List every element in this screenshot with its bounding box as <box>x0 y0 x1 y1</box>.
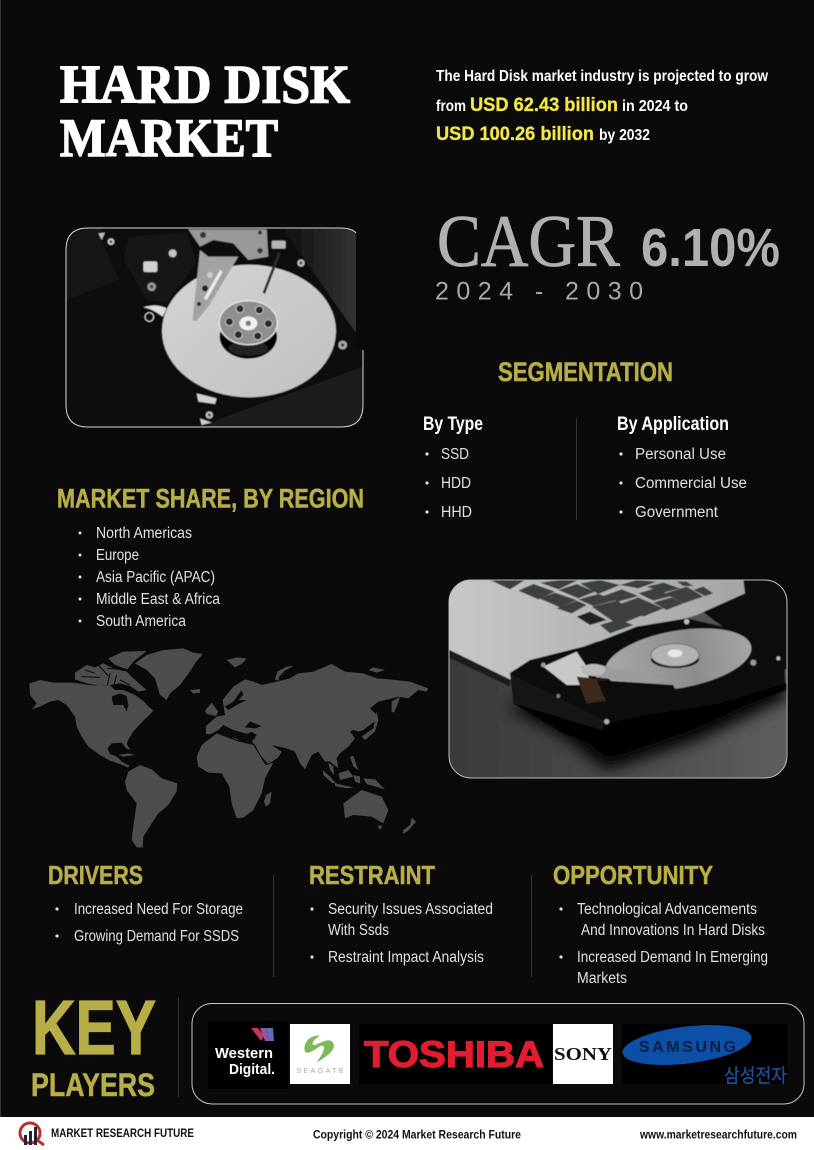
logo: Western Digital: Digital. <box>229 1061 275 1078</box>
heading: market share by region: MARKET SHARE, BY REGION <box>57 484 364 514</box>
restraint panel: Security Issues Associated <box>328 901 493 918</box>
logo: Sony: SONY <box>554 1044 612 1064</box>
market projection text <box>436 68 769 145</box>
footer logo icon <box>20 1123 44 1145</box>
opportunity panel: And Innovations In Hard Disks <box>581 922 765 939</box>
drivers panel: Increased Need For Storage <box>74 901 243 918</box>
logo: Samsung <box>620 1019 787 1088</box>
footer: MARKET RESEARCH FUTURE <box>51 1126 194 1140</box>
key players heading: KEY <box>32 985 156 1071</box>
logo: Seagate: SEAGATE <box>296 1068 344 1075</box>
logo: Western Digital: Western <box>215 1045 273 1062</box>
restraint panel: Restraint Impact Analysis <box>328 949 484 966</box>
world map <box>29 648 428 847</box>
region list <box>78 525 220 630</box>
drivers panel <box>48 860 243 945</box>
logo: Seagate <box>290 1024 350 1084</box>
segmentation list: by application: By Application <box>617 414 729 435</box>
market projection text: The Hard Disk market industry is projected to grow <box>436 68 769 85</box>
logo: Western Digital <box>208 1021 288 1089</box>
opportunity panel: OPPORTUNITY <box>553 860 713 890</box>
segmentation list: by type: HDD <box>441 475 471 492</box>
region list: Middle East & Africa <box>96 591 220 608</box>
restraint panel: With Ssds <box>328 922 389 939</box>
image: hard drive by laptop <box>448 580 790 778</box>
opportunity panel: Technological Advancements <box>577 901 757 918</box>
region list: South America <box>96 613 186 630</box>
region list: Europe <box>96 547 139 564</box>
logo: Samsung: 삼성전자 <box>724 1061 787 1088</box>
segmentation list: by application <box>617 414 747 521</box>
segmentation list: by type <box>423 414 483 521</box>
title: MARKET <box>60 108 278 168</box>
opportunity panel: Increased Demand In Emerging <box>577 949 768 966</box>
CAGR figure: 6.10% <box>641 218 780 278</box>
segmentation list: by type: HHD <box>441 504 472 521</box>
market projection text: USD 100.26 billion <box>436 124 594 145</box>
key players heading: PLAYERS <box>31 1067 155 1103</box>
key players logo panel <box>192 1004 804 1104</box>
market projection text: in 2024 to <box>622 98 688 115</box>
CAGR figure: CAGR <box>437 201 621 283</box>
segmentation list: by application: Government <box>635 504 719 521</box>
logo: Toshiba: TOSHIBA <box>364 1034 544 1075</box>
CAGR figure <box>435 201 780 306</box>
logo: Toshiba <box>359 1024 552 1084</box>
CAGR figure: 2024 - 2030 <box>435 278 643 306</box>
segmentation list: by type: SSD <box>441 446 469 463</box>
logo: Sony <box>553 1024 613 1084</box>
logo: Samsung: SAMSUNG <box>639 1039 736 1056</box>
title <box>60 54 350 168</box>
footer <box>0 1117 814 1150</box>
restraint panel: RESTRAINT <box>309 860 435 890</box>
segmentation list: by application: Commercial Use <box>635 475 747 492</box>
market projection text: from <box>436 98 466 115</box>
region list: Asia Pacific (APAC) <box>96 569 215 586</box>
footer: Copyright © 2024 Market Research Future <box>313 1128 521 1142</box>
market projection text: by 2032 <box>599 127 650 144</box>
restraint panel <box>309 860 493 966</box>
title: HARD DISK <box>60 54 350 114</box>
opportunity panel: Markets <box>577 970 627 987</box>
drivers panel: DRIVERS <box>48 860 143 890</box>
region list: North Americas <box>96 525 192 542</box>
segmentation list: by type: By Type <box>423 414 483 435</box>
segmentation list: by application: Personal Use <box>635 446 726 463</box>
image: open hard drive <box>66 228 363 427</box>
market projection text: USD 62.43 billion <box>470 95 618 116</box>
drivers panel: Growing Demand For SSDS <box>74 928 239 945</box>
heading: segmentation: SEGMENTATION <box>498 357 673 387</box>
opportunity panel <box>553 860 768 987</box>
key players heading <box>31 985 156 1103</box>
